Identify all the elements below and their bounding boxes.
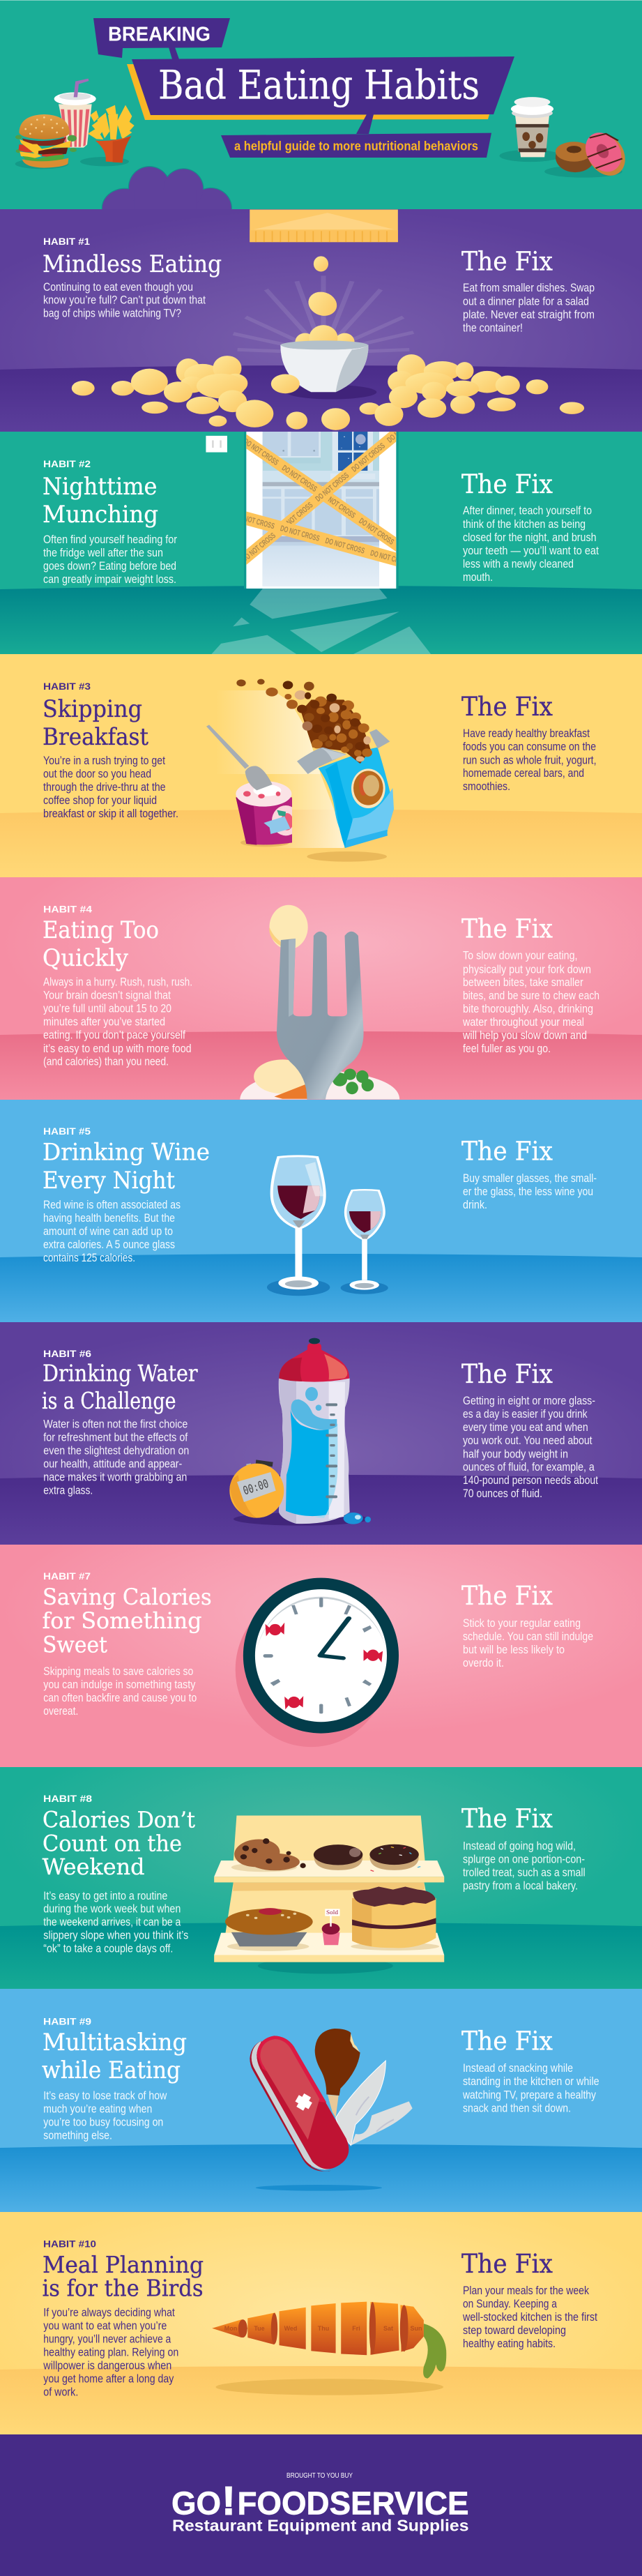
text: fix 5: The Fix xyxy=(461,1137,553,1166)
text: habit 7: HABIT #7 xyxy=(43,1570,91,1582)
illustration: sliced carrot xyxy=(212,2302,446,2395)
text: habit 10: you get home after a long day xyxy=(43,2372,174,2385)
text: habit 3: You’re in a rush trying to get xyxy=(43,755,165,767)
tape: do not cross: DO NOT CROSS xyxy=(234,512,275,531)
tape: do not cross: DO NOT CROSS xyxy=(319,490,357,520)
label: carrot days: Sun xyxy=(410,2325,422,2332)
text: habit 8: Count on the xyxy=(43,1830,182,1856)
text: habit 10: you want to eat when you’re xyxy=(43,2319,167,2332)
text: habit 3: out the door so you head xyxy=(43,768,151,780)
text: habit 9: you’re too busy focusing on xyxy=(43,2116,163,2128)
text: fix 8: The Fix xyxy=(461,1804,553,1834)
text: habit 6: our health, attitude and appear- xyxy=(43,1458,182,1471)
text: habit 3 xyxy=(43,681,178,820)
text: fix 9: snack and then sit down. xyxy=(463,2102,571,2114)
header banners and title: Bad Eating Habits xyxy=(158,63,480,109)
text: fix 9: watching TV, prepare a healthy xyxy=(462,2089,597,2102)
text: fix 7: overdo it. xyxy=(463,1657,504,1669)
text: habit 6: for refreshment but the effects of xyxy=(43,1431,188,1444)
text: fix 2: think of the kitchen as being xyxy=(463,518,586,531)
text: habit 2: goes down? Eating before bed xyxy=(43,560,176,573)
illustration: coffee and donuts xyxy=(500,97,631,178)
text: habit 1 xyxy=(43,236,222,319)
panel: habit 10 xyxy=(0,2212,642,2434)
panel: header xyxy=(0,0,642,209)
text: habit 8: Weekend xyxy=(42,1854,145,1880)
text: habit 2: Nighttime xyxy=(43,473,158,501)
tape: do not cross: DO NOT CROSS xyxy=(241,531,277,563)
text: fix 4: physically put your fork down xyxy=(463,963,591,976)
text: habit 9: Multitasking xyxy=(43,2029,187,2056)
footer credit: BROUGHT TO YOU BUY xyxy=(286,2472,353,2480)
text: habit 9: much you’re eating when xyxy=(43,2103,152,2116)
text: habit 4: you’re full until about 15 to 20 xyxy=(43,1003,171,1015)
text: habit 2: can greatly impair weight loss. xyxy=(43,573,176,586)
text: fix 3 xyxy=(461,692,597,793)
text: habit 5: Red wine is often associated as xyxy=(43,1199,181,1211)
text: fix 4: water throughout your meal xyxy=(462,1016,584,1029)
tape: do not cross: DO NOT CROSS xyxy=(396,543,434,573)
tape: do not cross: DO NOT CROSS xyxy=(350,441,387,474)
text: habit 7: Saving Calories xyxy=(43,1584,212,1610)
text: habit 1: HABIT #1 xyxy=(43,236,90,247)
text: habit 1: Mindless Eating xyxy=(43,250,222,278)
illustration: fast food xyxy=(15,79,135,169)
text: habit 6: extra glass. xyxy=(43,1485,93,1497)
text: habit 5: amount of wine can add up to xyxy=(43,1225,173,1238)
text: fix 9 xyxy=(461,2026,599,2114)
illustration: cloud shape xyxy=(102,166,232,229)
text: habit 9: something else. xyxy=(43,2130,112,2142)
tape: do not cross: DO NOT CROSS xyxy=(278,501,315,533)
illustration: water bottle and stopwatch: 00:00 xyxy=(241,1477,270,1497)
text: habit 10: hungry, you’ll never achieve a xyxy=(43,2333,171,2346)
text: habit 10: HABIT #10 xyxy=(43,2238,96,2250)
panel: habit 1 xyxy=(0,166,642,432)
text: fix 9: Instead of snacking while xyxy=(463,2062,573,2075)
text: fix 10: The Fix xyxy=(461,2249,553,2279)
text: fix 4: To slow down your eating, xyxy=(463,950,577,962)
label: carrot days: Fri xyxy=(352,2325,360,2332)
panel: habit 2 xyxy=(0,411,642,654)
label: carrot days: Wed xyxy=(284,2325,297,2332)
illustration: taped-off fridge xyxy=(206,432,431,654)
text: habit 6: Drinking Water xyxy=(43,1360,198,1387)
text: habit 5: HABIT #5 xyxy=(43,1126,91,1137)
text: habit 4: it’s easy to end up with more food xyxy=(43,1043,192,1055)
text: habit 8: the weekend arrives, it can be a xyxy=(43,1916,181,1928)
header banners and title: BREAKING xyxy=(108,24,211,46)
panel: habit 4 xyxy=(0,877,642,1100)
label: sold sign: Sold xyxy=(326,1909,338,1916)
text: habit 4: HABIT #4 xyxy=(43,904,92,915)
text: fix 10: Plan your meals for the week xyxy=(463,2285,590,2297)
text: fix 5 xyxy=(461,1137,597,1211)
text: fix 10: step toward developing xyxy=(463,2324,566,2337)
text: fix 6: 70 ounces of fluid. xyxy=(463,1487,542,1500)
header banners and title: a helpful guide to more nutritional behaviors xyxy=(234,139,478,153)
text: habit 2: Munching xyxy=(43,501,158,529)
text: habit 9: while Eating xyxy=(42,2056,181,2084)
tape: do not cross: DO NOT CROSS xyxy=(357,517,395,547)
panel: footer xyxy=(0,2434,642,2576)
text: fix 4: bites, and be sure to chew each xyxy=(463,990,599,1002)
text: fix 2: less with a newly cleaned xyxy=(463,558,574,570)
text: habit 3: HABIT #3 xyxy=(43,681,91,692)
text: fix 2 xyxy=(461,469,599,584)
panel: habit 5 xyxy=(0,1100,642,1322)
text: fix 10: on Sunday. Keeping a xyxy=(463,2298,558,2310)
text: fix 3: homemade cereal bars, and xyxy=(463,767,584,780)
text: habit 2: Often find yourself heading for xyxy=(43,533,177,546)
text: habit 10: willpower is dangerous when xyxy=(43,2359,171,2372)
panel: habit 8 xyxy=(0,1767,642,1989)
text: habit 8: slippery slope when you think it’s xyxy=(43,1930,188,1942)
text: habit 9: It’s easy to lose track of how xyxy=(43,2089,167,2102)
text: fix 9: The Fix xyxy=(461,2026,553,2056)
text: fix 8: trolled treat, such as a small xyxy=(463,1866,586,1879)
text: habit 7: Sweet xyxy=(43,1632,107,1658)
text: habit 5 xyxy=(43,1126,210,1264)
text: fix 10: well-stocked kitchen is the first xyxy=(462,2311,597,2324)
label: carrot days xyxy=(224,2325,422,2332)
tape: do not cross: DO NOT CROSS xyxy=(280,464,319,494)
text: habit 1: know you’re full? Can’t put down that xyxy=(43,294,206,307)
tape: do not cross: DO NOT CROSS xyxy=(242,437,280,467)
text: fix 6: half your body weight in xyxy=(463,1448,568,1460)
illustration: clock with candies xyxy=(236,1578,399,1747)
logo: GO!FOODSERVICE: FOODSERVICE xyxy=(237,2485,468,2522)
text: habit 6: HABIT #6 xyxy=(43,1348,91,1359)
text: habit 5: extra calories. A 5 ounce glass xyxy=(43,1238,175,1251)
text: fix 5: Buy smaller glasses, the small- xyxy=(463,1172,597,1185)
text: fix 5: er the glass, the less wine you xyxy=(463,1185,593,1198)
text: habit 3: through the drive-thru at the xyxy=(43,781,166,794)
text: habit 9 xyxy=(42,2015,187,2142)
text: habit 5: contains 125 calories. xyxy=(43,1252,135,1264)
tape: do not cross xyxy=(246,432,396,566)
text: fix 7 xyxy=(461,1581,593,1669)
illustration: swiss army knife with drumstick xyxy=(250,2029,413,2191)
text: fix 3: smoothies. xyxy=(463,780,510,793)
text: habit 10: healthy eating plan. Relying on xyxy=(43,2346,178,2358)
illustration: fork and plate xyxy=(240,905,399,1100)
illustration: wine glasses xyxy=(267,1156,388,1296)
text: habit 3: Skipping xyxy=(43,695,142,723)
text: habit 2: HABIT #2 xyxy=(43,458,91,469)
text: habit 7: you can indulge in something tasty xyxy=(43,1679,196,1691)
text: fix 6: 140-pound person needs about xyxy=(463,1474,598,1487)
text: fix 8: Instead of going hog wild, xyxy=(463,1840,576,1852)
text: fix 4: will help you slow down and xyxy=(462,1029,587,1042)
text: habit 4: (and calories) than you need. xyxy=(43,1056,169,1068)
text: habit 7 xyxy=(42,1570,212,1718)
text: fix 3: Have ready healthy breakfast xyxy=(463,727,590,740)
header banners and title xyxy=(93,18,514,158)
tape: do not cross: DO NOT CROSS xyxy=(280,524,321,543)
text: habit 7: can often backfire and cause you to xyxy=(43,1692,197,1704)
text: habit 8: “ok” to take a couple days off. xyxy=(43,1942,173,1955)
text: habit 1: Continuing to eat even though you xyxy=(43,281,193,294)
text: fix 1: plate. Never eat straight from xyxy=(463,308,595,321)
text: habit 6: even the slightest dehydration on xyxy=(43,1445,189,1457)
text: habit 8 xyxy=(42,1793,195,1955)
text: habit 6: nace makes it worth grabbing an xyxy=(43,1471,187,1484)
text: fix 6: ounces of fluid, for example, a xyxy=(463,1461,595,1473)
text: habit 2: the fridge well after the sun xyxy=(43,547,163,559)
text: fix 6 xyxy=(461,1359,598,1500)
text: habit 8: during the work week but when xyxy=(43,1903,181,1916)
text: fix 2: The Fix xyxy=(461,469,553,499)
text: habit 10: is for the Birds xyxy=(42,2275,204,2302)
text: habit 5: Drinking Wine xyxy=(43,1138,210,1166)
text: fix 4: feel fuller as you go. xyxy=(463,1043,551,1055)
logo: GO!FOODSERVICE xyxy=(171,2478,468,2523)
text: habit 3: coffee shop for your liquid xyxy=(43,794,157,807)
text: fix 7: but will be less likely to xyxy=(463,1644,565,1656)
illustration: water bottle and stopwatch xyxy=(229,1338,371,1526)
text: fix 2: After dinner, teach yourself to xyxy=(463,505,592,517)
text: fix 3: foods you can consume on the xyxy=(463,741,596,753)
text: fix 10: healthy eating habits. xyxy=(463,2338,556,2350)
text: habit 7: Skipping meals to save calories so xyxy=(43,1665,193,1678)
text: habit 8: It’s easy to get into a routine xyxy=(43,1890,167,1902)
text: habit 8: Calories Don’t xyxy=(43,1807,195,1833)
text: habit 1: bag of chips while watching TV? xyxy=(43,307,181,319)
text: fix 3: The Fix xyxy=(461,692,553,722)
illustration: yogurt and cereal bag xyxy=(206,679,394,862)
text: fix 8: pastry from a local bakery. xyxy=(463,1880,578,1893)
text: fix 2: closed for the night, and brush xyxy=(463,531,597,544)
text: fix 6: every time you eat and when xyxy=(463,1421,588,1434)
text: fix 10 xyxy=(461,2249,597,2350)
text: fix 8 xyxy=(461,1804,586,1893)
panel: habit 6 xyxy=(0,1322,642,1545)
text: habit 2 xyxy=(43,458,177,586)
text: fix 6: you work out. You need about xyxy=(463,1434,593,1447)
text: habit 4: eating. If you don’t pace yourself xyxy=(43,1029,185,1042)
text: fix 4 xyxy=(461,914,599,1055)
text: fix 1: out a dinner plate for a salad xyxy=(463,296,589,308)
panel: habit 9 xyxy=(0,1989,642,2212)
label: carrot days: Thu xyxy=(318,2325,329,2332)
text: fix 1: The Fix xyxy=(461,247,553,276)
panel: habit 3 xyxy=(0,654,642,877)
text: habit 7: for Something xyxy=(42,1607,202,1634)
text: fix 6: es a day is easier if you drink xyxy=(463,1408,588,1420)
text: fix 2: your teeth — you’ll want to eat xyxy=(463,545,599,557)
text: habit 6: Water is often not the first choice xyxy=(43,1418,188,1431)
text: habit 4: minutes after you’ve started xyxy=(43,1015,165,1028)
text: habit 4: Always in a hurry. Rush, rush, rush. xyxy=(43,976,192,989)
text: habit 4: Eating Too xyxy=(43,916,159,944)
text: habit 6: is a Challenge xyxy=(42,1387,176,1414)
text: habit 9: HABIT #9 xyxy=(43,2015,91,2026)
tape: do not cross: DO NOT CROSS xyxy=(324,537,366,556)
logo: GO!FOODSERVICE: ! xyxy=(222,2478,235,2523)
text: fix 7: schedule. You can still indulge xyxy=(463,1630,593,1643)
text: fix 6: Getting in eight or more glass- xyxy=(463,1395,595,1407)
text: habit 10: Meal Planning xyxy=(43,2251,204,2278)
text: habit 3: Breakfast xyxy=(43,723,148,751)
illustration: bakery shelves xyxy=(214,1815,444,1973)
text: habit 10: of work. xyxy=(43,2386,78,2398)
tape: do not cross: DO NOT CROSS xyxy=(385,412,422,445)
text: fix 5: drink. xyxy=(463,1199,487,1211)
text: fix 4: bite thoroughly. Also, drinking xyxy=(463,1003,593,1015)
text: habit 10 xyxy=(42,2238,204,2398)
tape: do not cross: DO NOT CROSS xyxy=(369,549,411,568)
logo: GO!FOODSERVICE: GO xyxy=(171,2485,221,2522)
text: habit 5: having health benefits. But the xyxy=(43,1212,175,1225)
text: fix 9: standing in the kitchen or while xyxy=(463,2075,599,2088)
text: habit 3: breakfast or skip it all together. xyxy=(43,808,178,820)
text: habit 8: HABIT #8 xyxy=(43,1793,92,1804)
text: habit 4: Your brain doesn’t signal that xyxy=(43,989,171,1001)
tape: do not cross: DO NOT CROSS xyxy=(314,471,351,503)
label: carrot days: Mon xyxy=(224,2325,237,2332)
text: habit 6 xyxy=(42,1348,198,1497)
text: fix 1: Eat from smaller dishes. Swap xyxy=(463,282,595,294)
panel: habit 7 xyxy=(0,1545,642,1767)
text: habit 4: Quickly xyxy=(43,944,129,972)
text: fix 1: the container! xyxy=(463,322,523,335)
text: fix 4: between bites, take smaller xyxy=(463,976,583,989)
label: carrot days: Sat xyxy=(383,2325,393,2332)
text: habit 4 xyxy=(43,904,192,1068)
text: habit 10: If you’re always deciding what xyxy=(43,2306,175,2319)
text: fix 1 xyxy=(461,247,595,335)
illustration: chip bag, chips and bowl xyxy=(72,210,584,430)
text: fix 4: The Fix xyxy=(461,914,553,944)
text: fix 6: The Fix xyxy=(461,1359,553,1389)
text: fix 3: run such as whole fruit, yogurt, xyxy=(463,755,597,767)
text: fix 8: splurge on one portion-con- xyxy=(463,1854,585,1866)
text: fix 7: The Fix xyxy=(461,1581,553,1611)
icon: light switch xyxy=(206,436,227,453)
tagline: Restaurant Equipment and Supplies xyxy=(172,2517,468,2535)
text: fix 7: Stick to your regular eating xyxy=(463,1617,581,1630)
text: fix 2: mouth. xyxy=(463,571,493,584)
text: habit 7: overeat. xyxy=(43,1705,78,1718)
text: habit 5: Every Night xyxy=(43,1167,175,1195)
label: carrot days: Tue xyxy=(254,2325,265,2332)
